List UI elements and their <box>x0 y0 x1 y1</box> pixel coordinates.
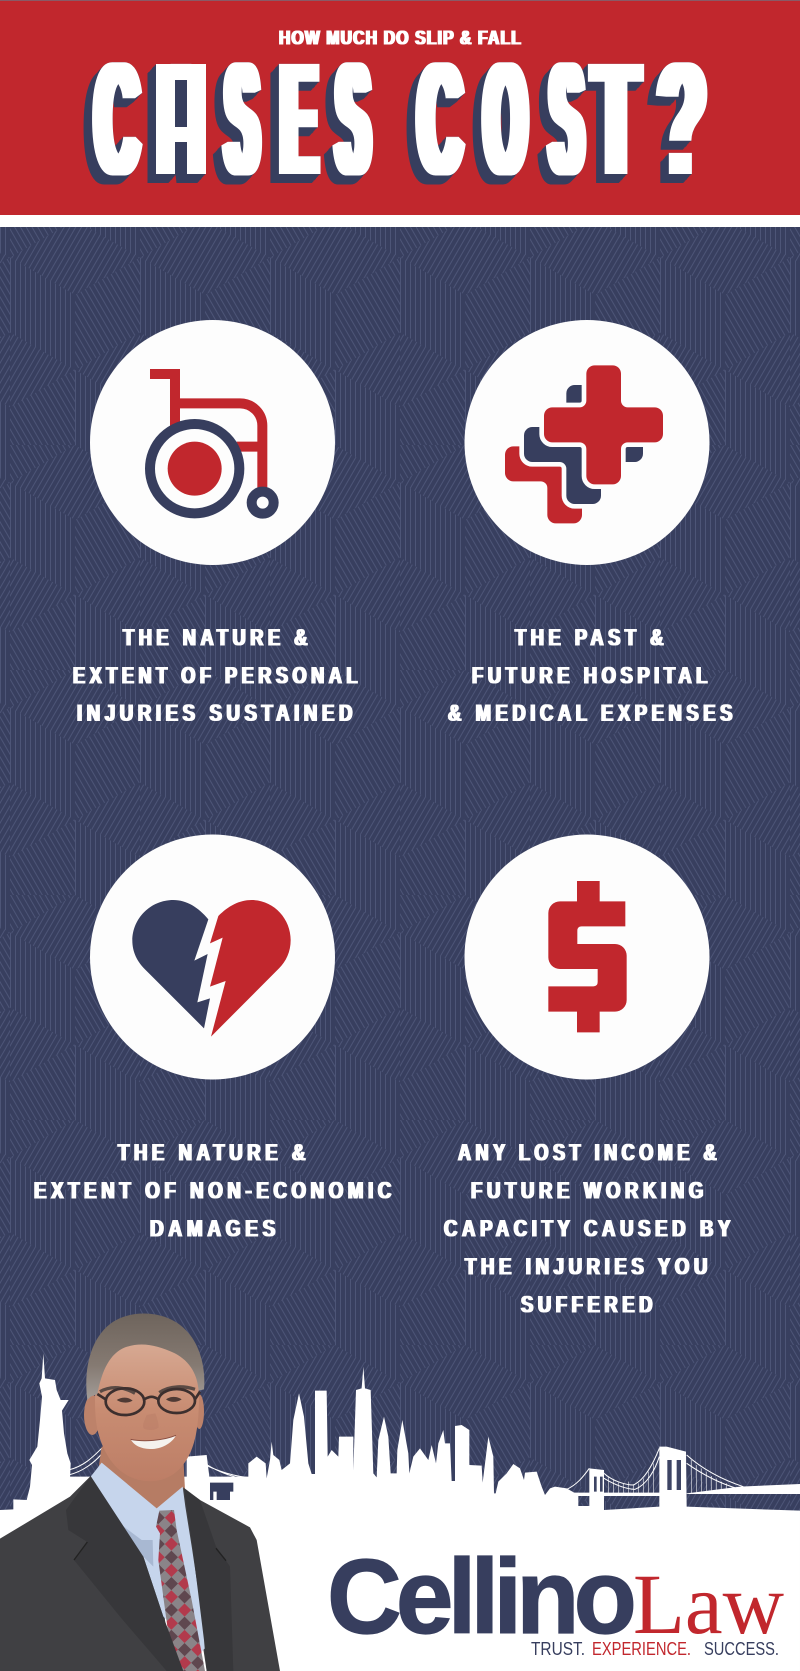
hair <box>86 1314 204 1400</box>
caption <box>73 624 362 727</box>
header subtitle: HOW MUCH DO SLIP & FALL <box>279 28 522 50</box>
caption: SUFFERED <box>521 1292 657 1318</box>
icon: broken heart <box>132 900 291 1037</box>
title: cases cost?: E <box>281 30 317 209</box>
wordmark: law: Law <box>633 1556 784 1652</box>
title: cases cost?: S <box>550 30 583 209</box>
tagline: EXPERIENCE. <box>592 1638 691 1659</box>
caption <box>444 1140 735 1318</box>
glasses <box>97 1388 200 1415</box>
caption: ANY LOST INCOME & <box>458 1140 721 1166</box>
caption <box>34 1140 396 1242</box>
title: cases cost?: ? <box>658 29 706 208</box>
tagline: TRUST. <box>531 1638 585 1659</box>
tagline: SUCCESS. <box>704 1638 779 1659</box>
caption: DAMAGES <box>150 1216 280 1242</box>
caption <box>448 624 737 727</box>
necktie <box>156 1510 205 1671</box>
caption: FUTURE HOSPITAL <box>472 662 712 690</box>
title: cases cost? <box>96 29 706 209</box>
title: cases cost?: C <box>419 29 461 208</box>
eyebrows <box>100 1387 195 1393</box>
panel: personal injuries <box>73 320 362 727</box>
icon: dollar sign <box>548 881 627 1032</box>
smile <box>131 1435 176 1449</box>
caption: INJURIES SUSTAINED <box>77 700 357 727</box>
wordmark: cellino: Cellino <box>327 1538 633 1656</box>
caption: THE NATURE & <box>118 1140 310 1166</box>
collar shading <box>111 1517 153 1567</box>
white circle <box>464 834 710 1080</box>
title: cases cost?: S <box>226 30 258 209</box>
photo: attorney portrait <box>0 1314 280 1671</box>
white circle <box>90 834 335 1080</box>
white circle <box>464 320 710 565</box>
panel: non-economic damages <box>34 834 396 1242</box>
title: cases cost?: S <box>337 30 369 209</box>
face <box>95 1338 199 1481</box>
title: cases cost?: T <box>593 31 639 209</box>
caption: THE INJURIES YOU <box>465 1254 712 1280</box>
panel: medical expenses <box>448 320 737 727</box>
panel: lost income <box>444 834 735 1318</box>
caption: THE PAST & <box>515 624 668 652</box>
caption: EXTENT OF NON-ECONOMIC <box>34 1178 396 1204</box>
title: cases cost?: A <box>162 30 200 209</box>
icon: wheelchair <box>150 374 274 514</box>
caption: FUTURE WORKING <box>471 1178 708 1204</box>
title: cases cost?: C <box>96 29 138 208</box>
suit jacket <box>0 1476 280 1671</box>
header banner <box>0 0 800 215</box>
new york skyline silhouette <box>0 1353 800 1671</box>
caption: EXTENT OF PERSONAL <box>73 662 362 690</box>
neck <box>98 1443 185 1513</box>
logo: cellino law <box>327 1538 784 1659</box>
dress shirt <box>91 1463 207 1653</box>
caption: THE NATURE & <box>123 624 312 652</box>
title: cases cost?: O <box>485 30 526 209</box>
eyes <box>117 1397 182 1403</box>
jacket lapels <box>66 1476 233 1671</box>
ears <box>84 1395 101 1435</box>
icon: medical crosses <box>505 365 663 523</box>
white circle <box>90 320 335 565</box>
nose shadow <box>143 1413 159 1430</box>
tagline <box>531 1638 779 1659</box>
